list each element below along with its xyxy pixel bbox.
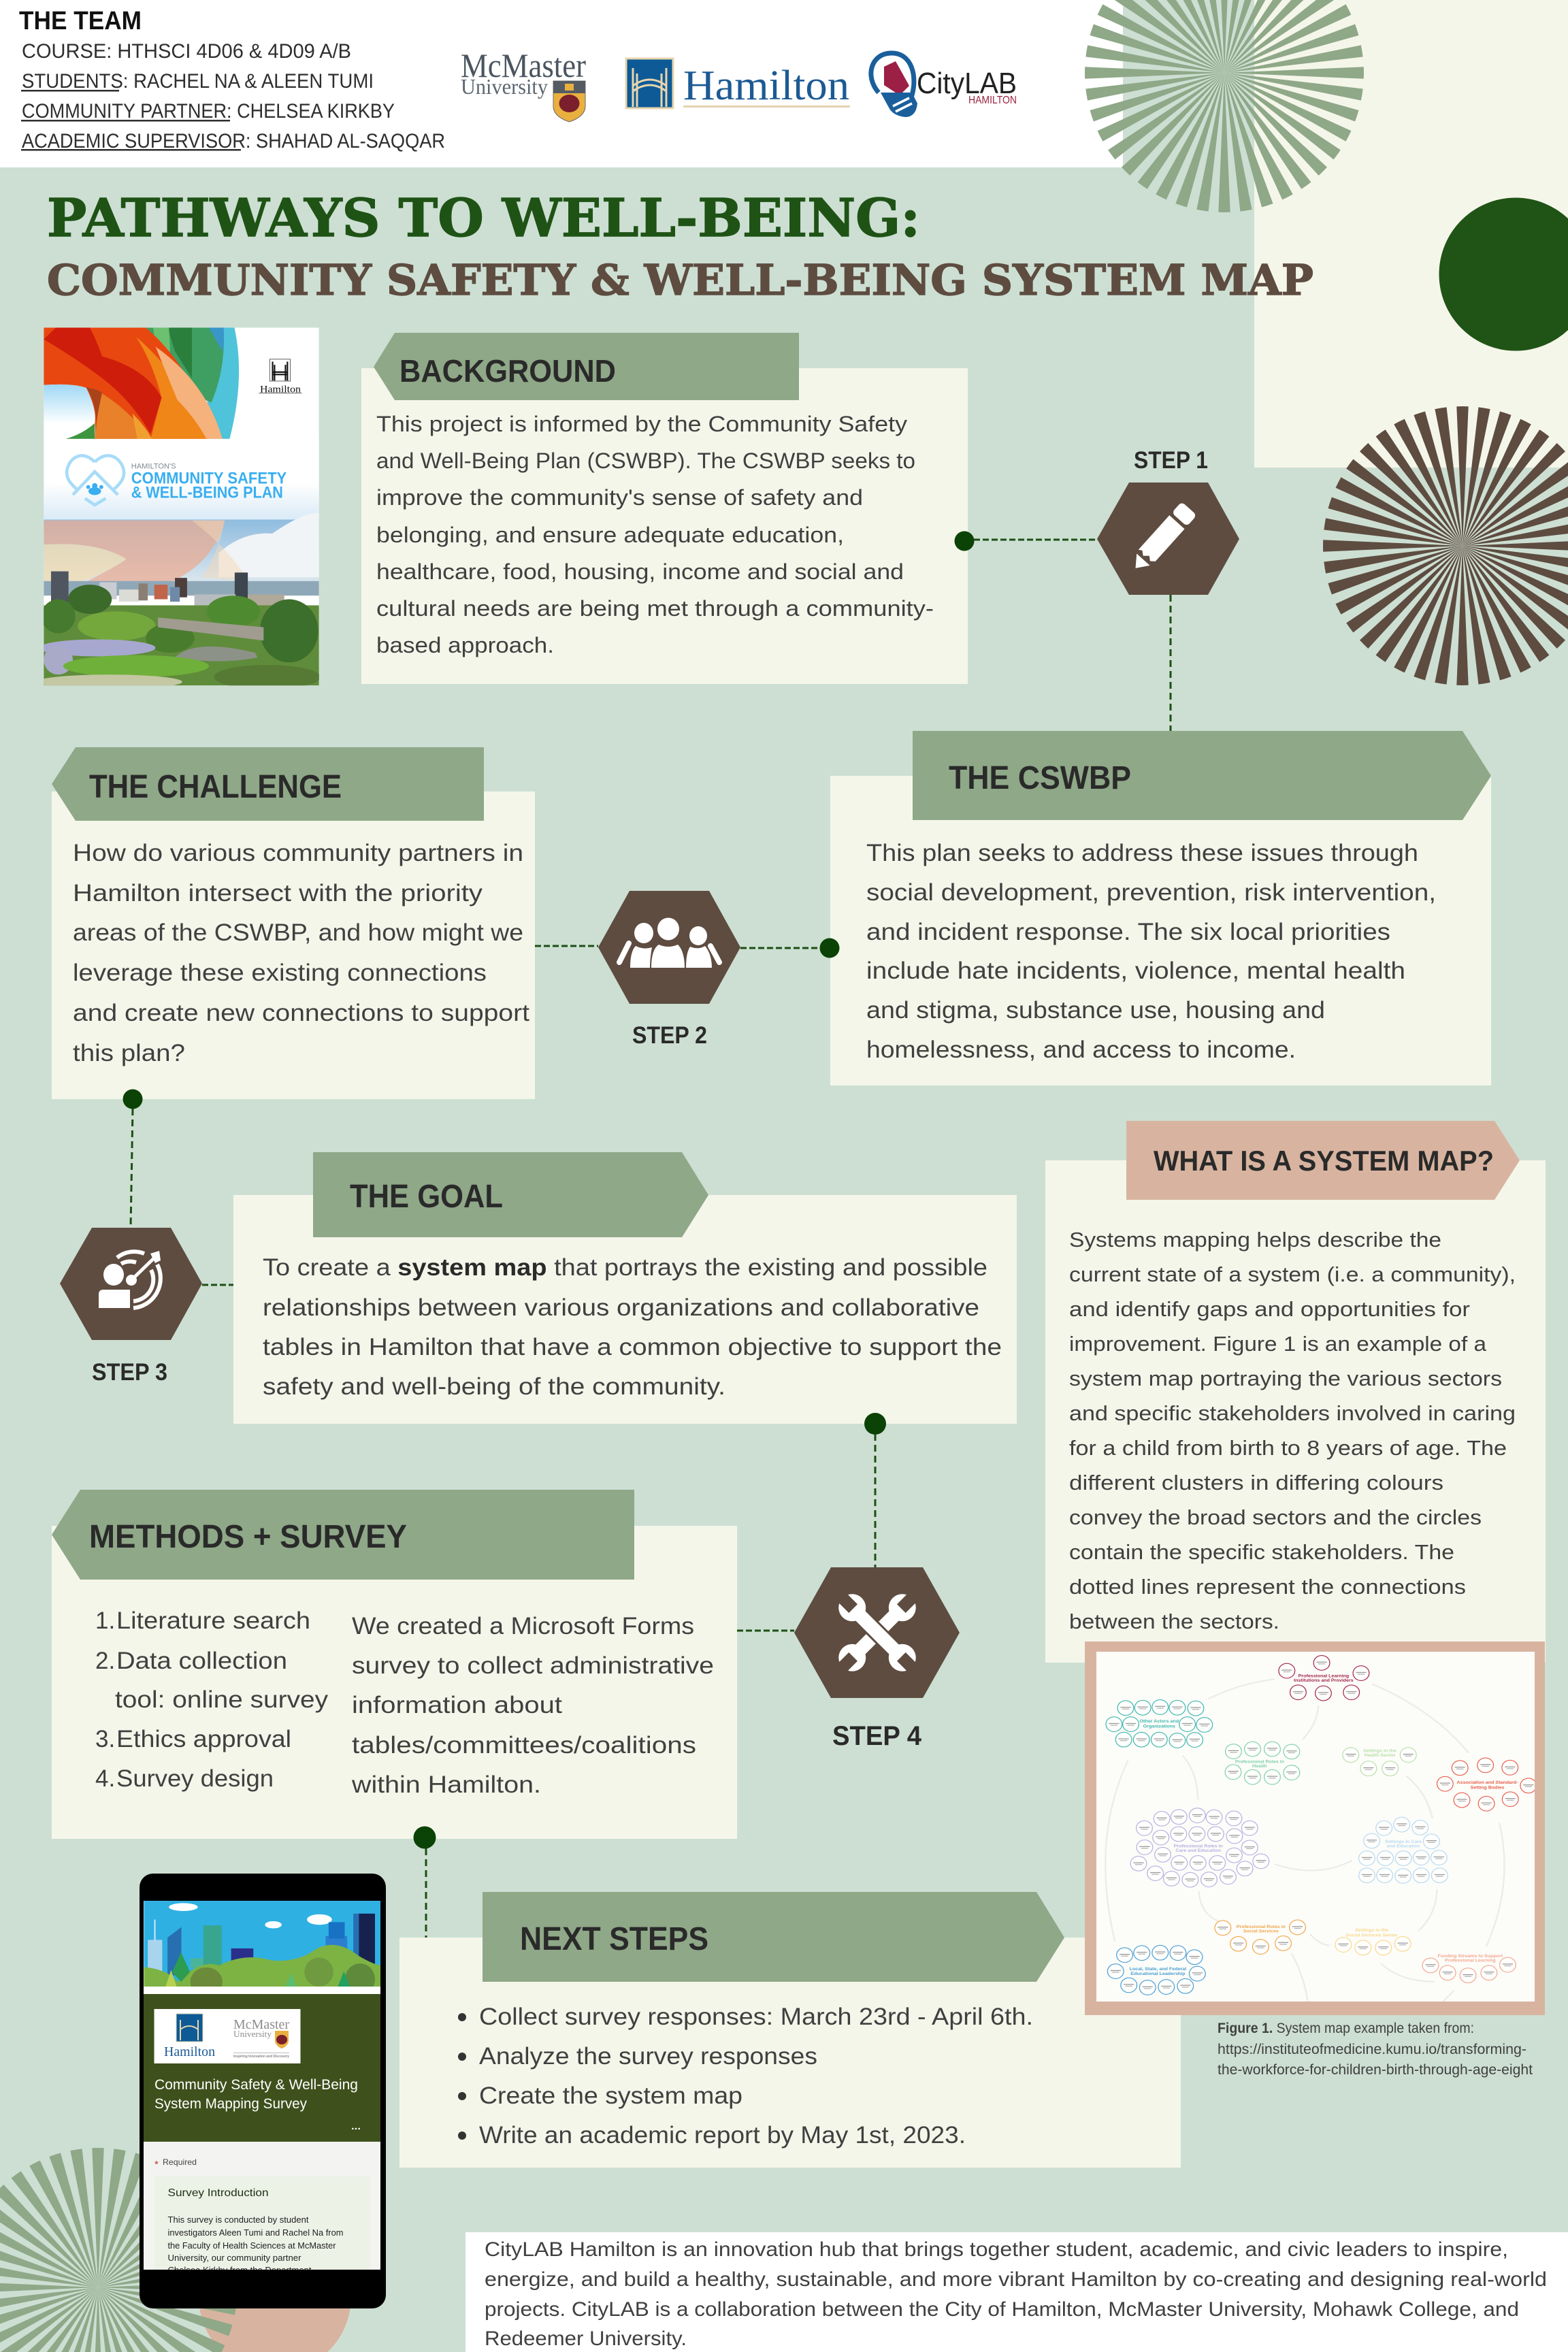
text: survey description — [351, 1613, 714, 1798]
figure: system map example: Professional Learning — [1445, 1959, 1496, 1963]
connector: step 1 — [954, 531, 1171, 732]
panel: the goal — [233, 1152, 1017, 1424]
text: system map body: convey the broad sectors and the circles — [1069, 1505, 1482, 1529]
text: background body: healthcare, food, housing, income and social and — [376, 559, 904, 584]
figure: system map example: Organizations — [1143, 1725, 1175, 1729]
text: challenge body: How do various community partners in — [73, 840, 523, 866]
figure caption: https://instituteofmedicine.kumu.io/transforming- — [1218, 2042, 1526, 2057]
subtitle: COMMUNITY SAFETY & WELL-BEING SYSTEM MAP — [47, 255, 1313, 305]
list: next steps: Analyze the survey responses — [479, 2043, 817, 2070]
phone survey intro card: University, our community partner — [167, 2253, 301, 2263]
sunburst: green top — [1064, 0, 1384, 233]
list: methods: 3. — [95, 1726, 115, 1752]
logo: City of Hamilton: Hamilton — [683, 63, 849, 109]
title: PATHWAYS TO WELL-BEING: — [47, 188, 920, 249]
logo: McMaster University — [461, 46, 586, 122]
logo: McMaster University: University — [461, 74, 548, 99]
team block: ACADEMIC SUPERVISOR: SHAHAD AL-SAQQAR — [22, 130, 445, 152]
phone survey intro card: the Faculty of Health Sciences at McMaster — [167, 2240, 336, 2251]
team block: THE TEAM — [19, 7, 142, 35]
banner: methods + survey — [52, 1490, 634, 1580]
figure: system map example: Professional Roles in — [1237, 1925, 1286, 1929]
banner: the challenge — [52, 747, 484, 821]
figure: system map example: Settings in the — [1355, 1928, 1388, 1933]
figure: system map example: Health Sector — [1365, 1753, 1396, 1758]
white header band — [0, 0, 1123, 167]
CityLAB description box — [466, 2232, 1568, 2352]
phone survey intro card: investigators Aleen Tumi and Rachel Na from — [167, 2227, 343, 2238]
list: methods: Data collection — [116, 1648, 287, 1674]
text: system map body: between the sectors. — [1069, 1610, 1279, 1633]
peach circle — [199, 2221, 351, 2352]
text: system map body: and identify gaps and opportunities for — [1069, 1297, 1470, 1321]
logo: City of Hamilton — [626, 59, 850, 109]
banner: next steps — [483, 1892, 1064, 1982]
plan cover image — [37, 327, 321, 689]
phone mockup: survey — [140, 1874, 386, 2308]
text: background body: cultural needs are being met through a community- — [376, 596, 934, 621]
sunburst: green bottom-left — [0, 2127, 258, 2352]
phone survey intro card — [154, 2176, 370, 2275]
figure caption — [1218, 2021, 1533, 2078]
panel: methods + survey — [52, 1490, 737, 1839]
text: background body: and Well-Being Plan (CSWBP). The CSWBP seeks to — [376, 448, 915, 473]
logo: CityLAB Hamilton — [871, 53, 1017, 117]
text: system map body — [1069, 1228, 1516, 1633]
phone survey title: ... — [351, 2121, 361, 2132]
panel: what is a system map — [1045, 1121, 1546, 1663]
step 2 label: STEP 2 — [632, 1022, 707, 1049]
text: system map body: Systems mapping helps describe the — [1069, 1228, 1441, 1252]
figure: system map example: Association and Standard- — [1457, 1780, 1518, 1785]
figure caption: Figure 1. System map example taken from: — [1218, 2021, 1474, 2036]
banner: the goal — [313, 1152, 708, 1237]
heading: methods + survey: METHODS + SURVEY — [89, 1519, 407, 1555]
text: system map body: system map portraying the various sectors — [1069, 1367, 1502, 1390]
plan cover image: COMMUNITY SAFETY — [131, 470, 287, 488]
figure: system map example: Settings in Care — [1385, 1840, 1422, 1844]
text: challenge body: this plan? — [73, 1040, 185, 1066]
banner: what is a system map — [1126, 1121, 1520, 1200]
step 3 hexagon: target icon — [60, 1228, 202, 1340]
text: CSWBP body: This plan seeks to address these issues through — [866, 840, 1418, 866]
list: methods: Ethics approval — [116, 1726, 291, 1752]
cover Hamilton mark — [259, 359, 302, 395]
figure: system map example: Care and Education — [1175, 1848, 1221, 1853]
figure: system map example: Social Services — [1243, 1929, 1279, 1933]
text: background body: belonging, and ensure adequate education, — [376, 523, 844, 547]
text: system map body: different clusters in differing colours — [1069, 1471, 1443, 1494]
phone required note: Required — [163, 2157, 197, 2167]
text: challenge body: leverage these existing connections — [73, 960, 487, 986]
text: goal body — [263, 1254, 1002, 1400]
text: background body: based approach. — [376, 633, 554, 657]
panel: background — [361, 333, 968, 684]
text: goal body: relationships between various organizations and collaborative — [263, 1294, 979, 1321]
text: system map body: for a child from birth to 8 years of age. The — [1069, 1436, 1507, 1460]
heading: the goal: THE GOAL — [350, 1179, 503, 1215]
phone logos: University — [233, 2029, 272, 2039]
text: system map body: contain the specific stakeholders. The — [1069, 1540, 1454, 1564]
CityLAB description box: Redeemer University. — [485, 2328, 687, 2350]
heading: next steps: NEXT STEPS — [520, 1921, 708, 1957]
dark green circle — [1439, 197, 1568, 351]
text: survey description: tables/committees/coalitions — [352, 1732, 696, 1759]
text: system map body: current state of a system (i.e. a community), — [1069, 1262, 1516, 1286]
panel: the CSWBP — [830, 731, 1491, 1085]
panel: the challenge — [52, 747, 535, 1099]
phone banner illustration — [144, 1901, 380, 1987]
team block — [19, 7, 445, 152]
list: methods: Literature search — [116, 1607, 310, 1634]
text: goal body: safety and well-being of the community. — [263, 1373, 725, 1400]
phone required note: * — [154, 2159, 159, 2170]
cream corner block — [1254, 0, 1568, 468]
heading: the challenge: THE CHALLENGE — [89, 769, 342, 805]
text: system map body: dotted lines represent the connections — [1069, 1575, 1466, 1599]
team block: COURSE: HTHSCI 4D06 & 4D09 A/B — [22, 40, 351, 63]
list: methods: 1. — [95, 1607, 115, 1634]
connector: step 4 — [737, 1413, 886, 1631]
phone logos: Hamilton — [164, 2044, 215, 2059]
list: next steps: Write an academic report by May 1st, 2023. — [479, 2122, 966, 2149]
CityLAB description box: CityLAB Hamilton is an innovation hub that brings together student, academic, and civic leaders to inspire, — [485, 2238, 1508, 2261]
CityLAB description box: energize, and build a healthy, sustainable, and more vibrant Hamilton by co-creating and designing real-world — [485, 2268, 1547, 2291]
figure: system map example: Professional Learning — [1298, 1674, 1349, 1679]
phone logos — [154, 2009, 301, 2063]
list: next steps: Collect survey responses: March 23rd - April 6th. — [479, 2004, 1033, 2030]
logo: McMaster University: McMaster — [461, 46, 586, 84]
sunburst: brown right — [1303, 386, 1568, 706]
figure: system map example — [1085, 1642, 1545, 2015]
phone survey title: Community Safety & Well-Being — [154, 2077, 358, 2093]
text: background body: This project is informed by the Community Safety — [376, 412, 907, 436]
text: background body — [376, 412, 934, 657]
text: CSWBP body: and stigma, substance use, housing and — [866, 997, 1325, 1024]
step 4 label: STEP 4 — [832, 1721, 922, 1751]
step 4 hexagon: wrench icon — [794, 1567, 960, 1698]
logo: CityLAB Hamilton: HAMILTON — [968, 95, 1017, 106]
banner: background — [374, 333, 799, 400]
step 1 label: STEP 1 — [1134, 447, 1208, 474]
figure: system map example: Local, State, and Federal — [1130, 1967, 1186, 1972]
text: challenge body: areas of the CSWBP, and how might we — [73, 919, 523, 946]
plan cover image: & WELL-BEING PLAN — [131, 483, 283, 502]
text: goal body: tables in Hamilton that have a common objective to support the — [263, 1334, 1002, 1360]
list: methods — [95, 1607, 329, 1792]
text: goal body: To create a system map that portrays the existing and possible — [263, 1254, 987, 1281]
figure: system map example: Other Actors and — [1139, 1719, 1179, 1724]
cover heart logo — [67, 455, 124, 505]
figure: system map example: Educational Leadership — [1130, 1972, 1185, 1976]
phone survey intro card: Survey Introduction — [167, 2187, 268, 2199]
figure: system map example: Professional Roles in — [1174, 1844, 1223, 1848]
text: challenge body: and create new connections to support — [73, 1000, 529, 1026]
text: CSWBP body: social development, prevention, risk intervention, — [866, 879, 1436, 906]
heading: what is a system map: WHAT IS A SYSTEM MAP? — [1154, 1145, 1494, 1177]
text: challenge body — [73, 840, 529, 1066]
text: survey description: within Hamilton. — [351, 1771, 541, 1798]
cover title text: HAMILTON'S — [131, 462, 176, 470]
list: methods: Survey design — [116, 1765, 274, 1792]
text: system map body: improvement. Figure 1 is an example of a — [1069, 1332, 1487, 1356]
team block: STUDENTS: RACHEL NA & ALEEN TUMI — [22, 70, 374, 93]
figure: system map example: Social Services Sector — [1346, 1933, 1398, 1938]
step 2 hexagon: people icon — [598, 891, 740, 1004]
list: next steps — [458, 2004, 1033, 2149]
phone logos: Inspiring Innovation and Discovery — [233, 2055, 289, 2059]
figure: system map example: Settings in the — [1363, 1749, 1396, 1753]
figure caption: the-workforce-for-children-birth-through-age-eight — [1218, 2062, 1533, 2078]
figure: system map example: and Education — [1387, 1844, 1420, 1848]
heading: background: BACKGROUND — [399, 353, 616, 389]
list: methods: 2. — [95, 1648, 115, 1674]
text: background body: improve the community's sense of safety and — [376, 485, 863, 510]
text: survey description: We created a Microsoft Forms — [352, 1613, 694, 1639]
logo: CityLAB Hamilton: CityLAB — [917, 67, 1017, 100]
figure: system map example: Funding Streams to Support — [1437, 1954, 1503, 1959]
figure: system map example: Setting Bodies — [1471, 1786, 1505, 1790]
phone survey intro card: Chelsea Kirkby from the Department — [167, 2265, 312, 2275]
list: methods: 4. — [95, 1765, 115, 1792]
connector: methods to next steps — [414, 1827, 436, 1938]
panel: next steps — [399, 1892, 1181, 2168]
connector: step 2 — [535, 938, 840, 958]
text: challenge body: Hamilton intersect with the priority — [73, 880, 483, 906]
phone survey title — [154, 2077, 361, 2132]
figure: system map example: Health — [1252, 1764, 1267, 1769]
heading: the CSWBP: THE CSWBP — [949, 760, 1131, 796]
text: CSWBP body — [866, 840, 1436, 1063]
text: survey description: information about — [352, 1692, 562, 1718]
list: methods: tool: online survey — [115, 1686, 329, 1713]
text: CSWBP body: and incident response. The six local priorities — [866, 919, 1390, 945]
banner: the CSWBP — [913, 731, 1491, 820]
figure: system map example: Institutions and Providers — [1294, 1678, 1354, 1683]
cover Hamilton mark: Hamilton — [260, 384, 301, 395]
text: system map body: and specific stakeholders involved in caring — [1069, 1401, 1516, 1425]
team block: COMMUNITY PARTNER: CHELSEA KIRKBY — [22, 100, 395, 122]
phone logos: McMaster — [233, 2017, 289, 2032]
text: survey description: survey to collect administrative — [352, 1652, 714, 1679]
text: CSWBP body: include hate incidents, violence, mental health — [866, 958, 1405, 984]
phone survey intro card: This survey is conducted by student — [167, 2215, 309, 2225]
figure: system map example: Professional Roles in — [1235, 1760, 1284, 1764]
CityLAB description box: projects. CityLAB is a collaboration between the City of Hamilton, McMaster University, Mohawk College, and — [485, 2298, 1519, 2321]
text: CSWBP body: homelessness, and access to income. — [866, 1036, 1296, 1063]
connector: step 3 — [122, 1089, 234, 1285]
step 3 label: STEP 3 — [92, 1359, 167, 1386]
phone survey title: System Mapping Survey — [154, 2096, 307, 2112]
list: next steps: Create the system map — [479, 2082, 742, 2109]
phone required note — [154, 2159, 196, 2167]
step 1 hexagon: pencil icon — [1097, 483, 1239, 595]
